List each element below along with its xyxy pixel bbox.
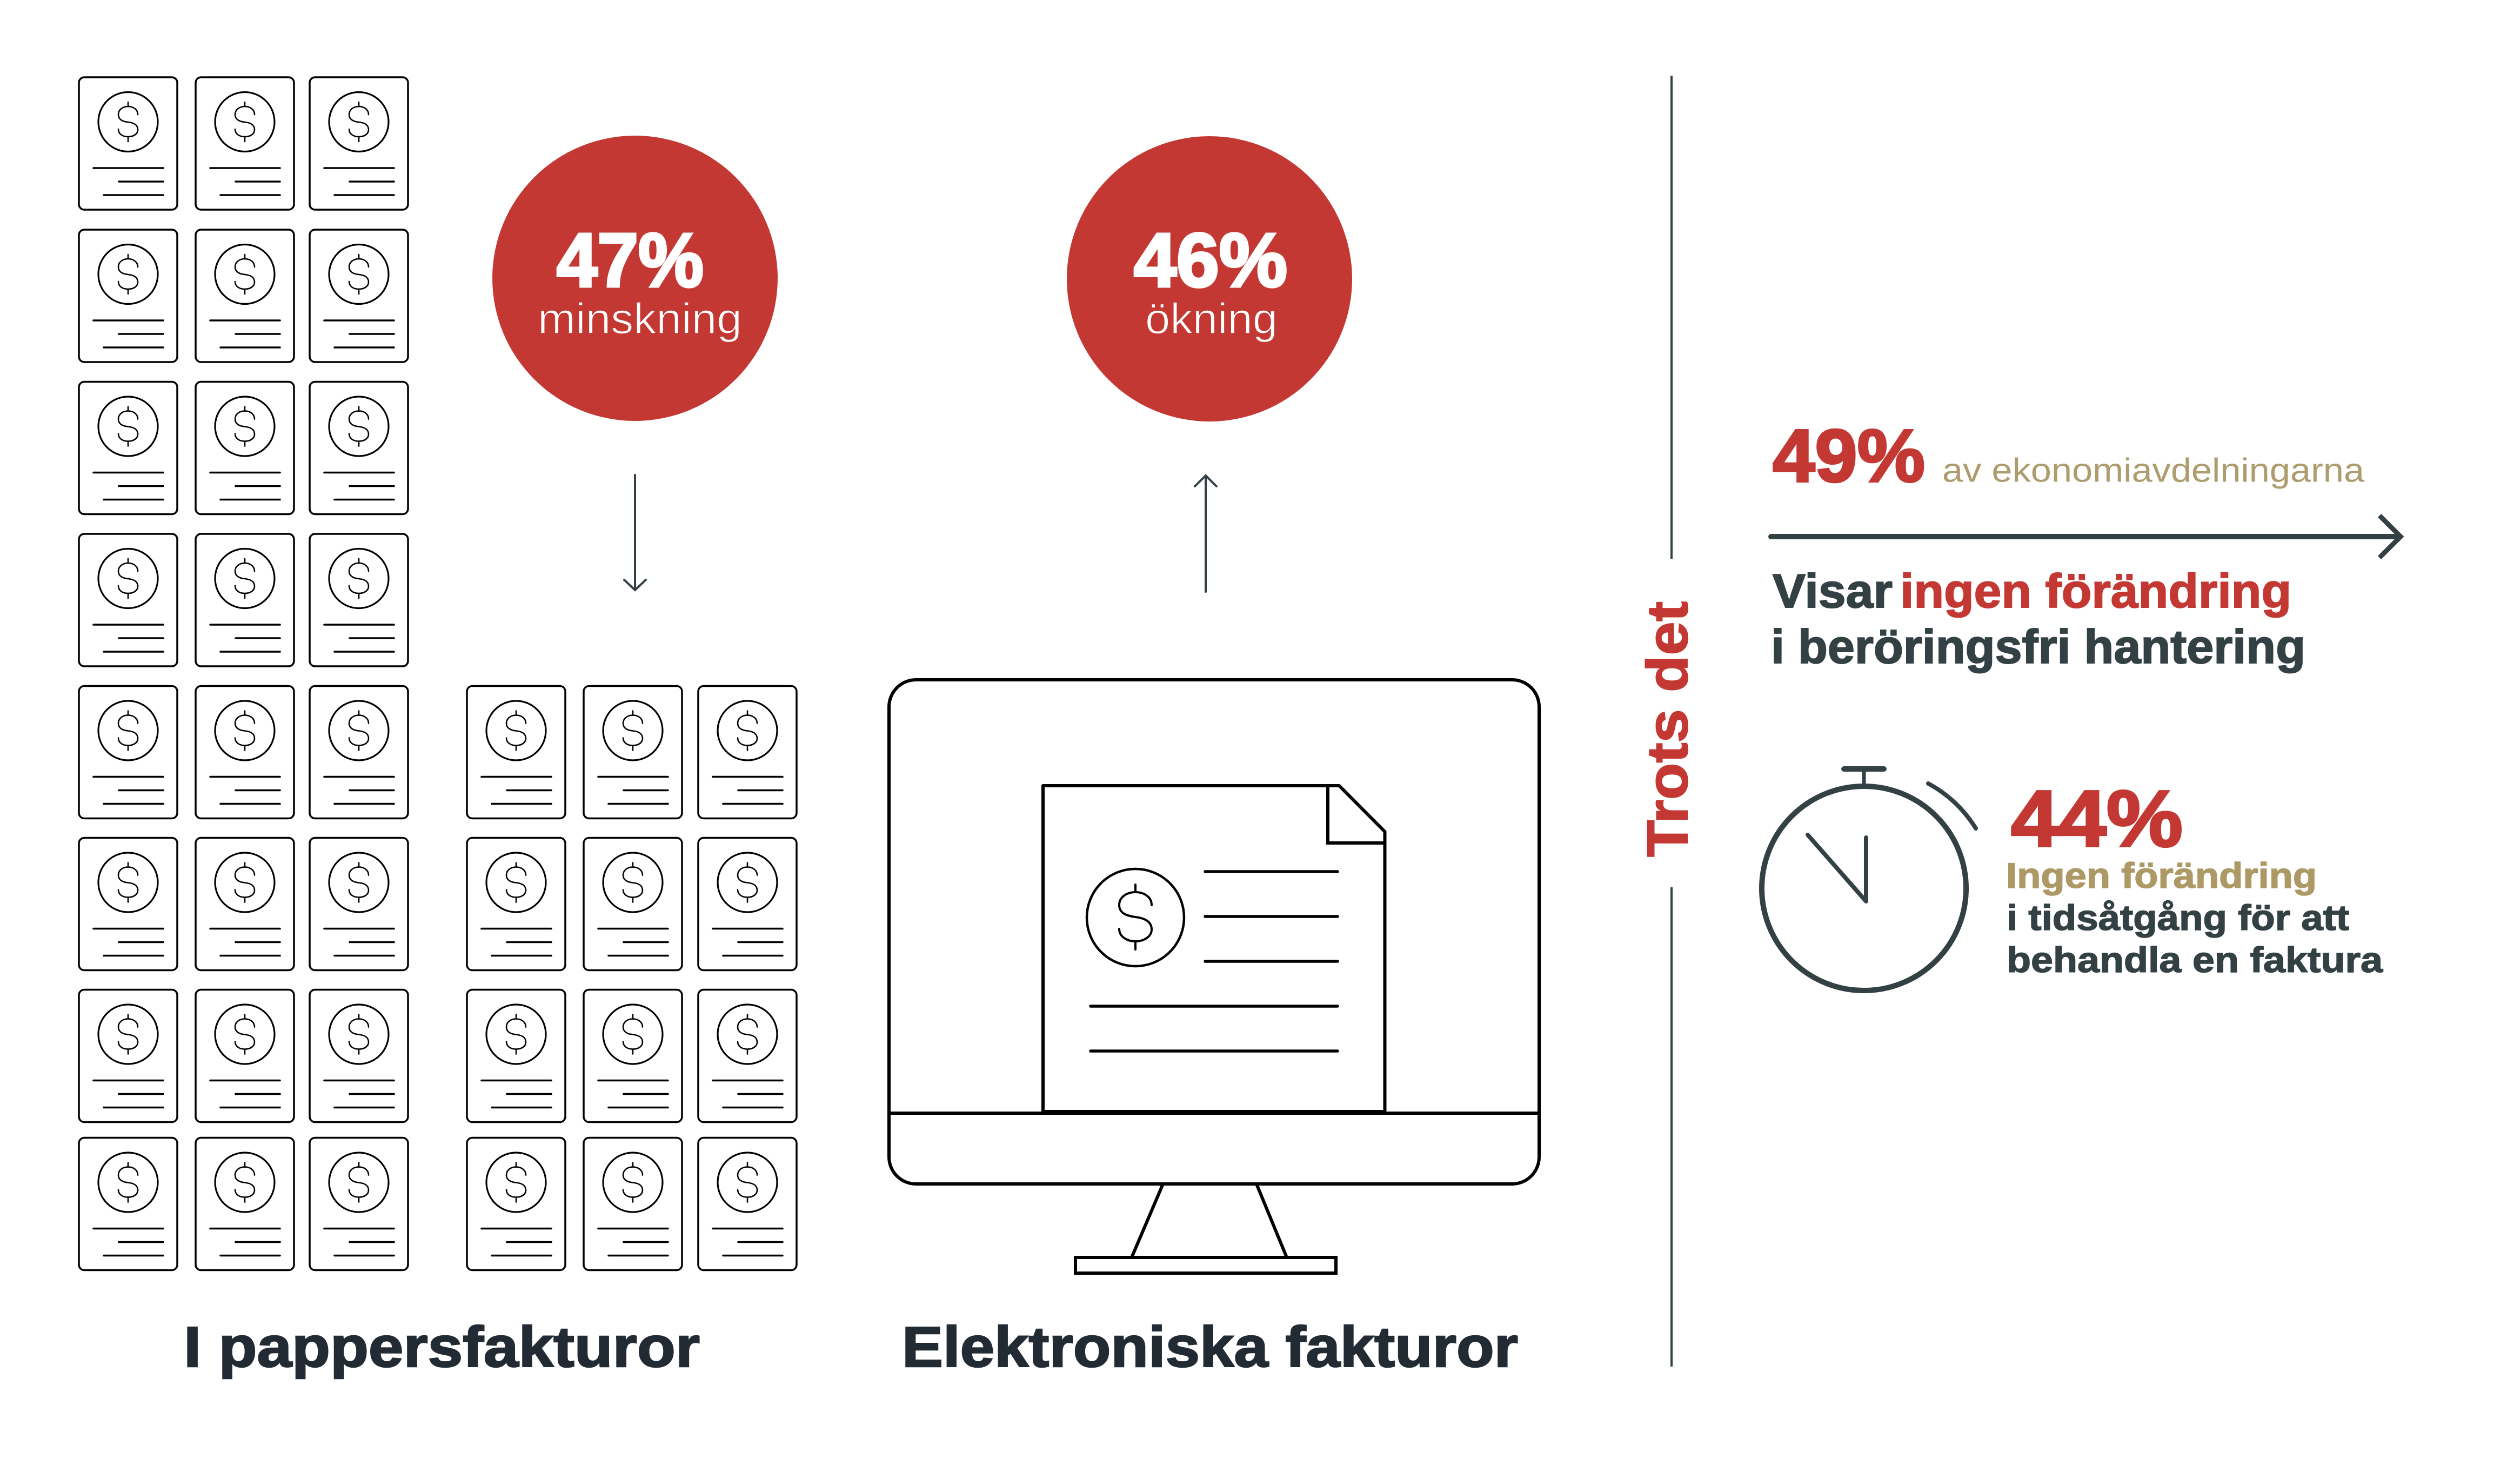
divider upper — [1670, 76, 1673, 559]
invoice row 8 right — [467, 1138, 797, 1270]
invoice row 6 — [79, 838, 408, 971]
invoice row 3 — [79, 382, 408, 514]
invoice row 7 right — [467, 990, 797, 1122]
arrow: up — [1195, 476, 1216, 592]
stat: 49% av ekonomiavdelningarna — [1773, 414, 2365, 498]
text block: Visar ingen förändring i beröringsfri hantering — [1771, 564, 2305, 673]
invoice document — [1043, 786, 1385, 1112]
invoice row 8 — [79, 1138, 408, 1270]
invoice row 2 — [79, 230, 408, 362]
label: ökning: ökning — [1145, 295, 1278, 343]
number: 49%: 49% — [1773, 414, 1925, 498]
icon: computer monitor with invoice — [889, 680, 1539, 1273]
icon: stopwatch — [1762, 769, 1976, 990]
text: Ingen förändring: Ingen förändring — [2006, 855, 2317, 895]
number: 44%: 44% — [2011, 774, 2183, 864]
invoice row 1 — [79, 77, 408, 210]
text: Visar: Visar — [1773, 564, 1893, 618]
invoice row 5 — [79, 686, 408, 818]
invoice row 7 — [79, 990, 408, 1122]
monitor stand — [1132, 1184, 1287, 1257]
vertical label: Trots det: Trots det — [1635, 601, 1700, 857]
invoice row 4 — [79, 534, 408, 666]
text block: 44% ingen förändring — [2006, 774, 2383, 980]
text: i tidsåtgång för att: i tidsåtgång för att — [2007, 898, 2349, 938]
label: minskning: minskning — [538, 295, 742, 343]
monitor base — [1075, 1257, 1336, 1273]
text: ingen förändring: ingen förändring — [1900, 564, 2291, 618]
callout: 47% minskning — [492, 136, 778, 421]
heading: Elektroniska fakturor: Elektroniska fakturor — [902, 1315, 1518, 1379]
heading: I pappersfakturor: I pappersfakturor — [184, 1315, 700, 1379]
arrow: down — [624, 475, 646, 590]
stat: 47%: 47% — [557, 217, 704, 303]
invoice row 6 right — [467, 838, 797, 971]
text: av ekonomiavdelningarna: av ekonomiavdelningarna — [1942, 452, 2365, 490]
text: behandla en faktura: behandla en faktura — [2007, 940, 2383, 980]
stat: 46%: 46% — [1134, 217, 1287, 303]
divider lower — [1670, 887, 1673, 1367]
invoice row 5 right — [467, 686, 797, 818]
callout: 46% ökning — [1067, 136, 1352, 421]
icon stack: paper invoices, right group of 4 rows — [467, 686, 797, 1270]
text: i beröringsfri hantering: i beröringsfri hantering — [1771, 620, 2305, 673]
arrow: right — [1771, 516, 2401, 558]
monitor body — [889, 680, 1539, 1184]
icon stack: paper invoices, left group of 8 rows — [79, 77, 408, 1270]
